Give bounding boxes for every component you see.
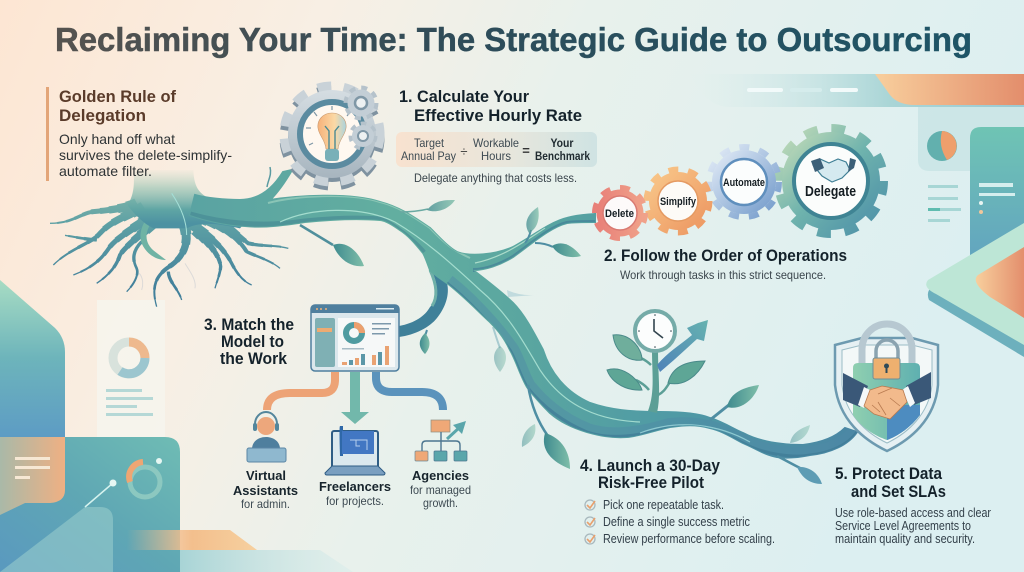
tree roots [50,170,288,307]
gear: automate [709,147,779,217]
callout: golden rule of delegation [46,87,232,181]
gear: automate: Automate [723,177,765,189]
section 1: calculate effective hourly rate [396,88,597,185]
icon: clock sapling with arrow [607,311,708,413]
gear: simplify: Simplify [660,196,697,208]
callout: golden rule of delegation: Delegation [59,107,146,125]
icon: gear with light bulb [286,88,378,184]
label: agencies: Agencies [412,468,469,483]
gear: delegate [778,128,884,234]
section 2: follow the order of operations [604,247,847,282]
title: Reclaiming Your Time: The Strategic Guide to Outsourcing [55,21,972,58]
section 3 heading: the Work [220,350,288,368]
section 5: protect data and SLAs: 5. Protect Data [835,465,943,483]
label: virtual assistants [233,468,298,511]
checklist: Pick one repeatable task. [603,498,724,512]
icon: dashboard monitor [311,305,399,371]
section 5: protect data and SLAs: maintain quality and security. [835,532,975,546]
section 3 heading [204,316,294,368]
formula pill: Your [550,136,574,150]
gear: delete: Delete [605,208,634,220]
gear: delete [594,188,646,238]
label: freelancers: for projects. [326,494,384,508]
callout: golden rule of delegation: Golden Rule of [59,88,176,106]
checklist: Define a single success metric [603,515,750,529]
label: freelancers: Freelancers [319,479,391,494]
section 1: calculate effective hourly rate: Delegate anything that costs less. [414,171,577,185]
section 1: calculate effective hourly rate: 1. Calculate Your [399,88,530,106]
gear: delegate: Delegate [805,184,856,200]
decorative background shapes: top right [690,74,1024,357]
section 2: follow the order of operations: Work through tasks in this strict sequence. [620,268,826,282]
callout: golden rule of delegation: Only hand off what [59,131,175,147]
section 3 heading: Model to [221,333,284,351]
section 3 heading: 3. Match the [204,316,294,334]
section 5: protect data and SLAs: Service Level Agreements to [835,519,971,533]
callout: golden rule of delegation: survives the delete-simplify- [59,147,232,163]
icon: freelancer laptop [325,426,385,475]
decorative background shapes: bottom left [0,280,353,572]
checklist [585,498,775,546]
label: virtual assistants: Virtual [246,468,286,483]
label: agencies: growth. [423,496,458,510]
tree trunk and branches [190,167,857,468]
formula pill: Hours [481,149,511,163]
section 5: protect data and SLAs: Use role-based access and clear [835,506,991,520]
formula pill: ÷ [460,144,468,159]
formula pill [396,132,597,167]
label: virtual assistants: for admin. [241,497,290,511]
section 1: calculate effective hourly rate: Effective Hourly Rate [414,107,582,125]
label: freelancers [319,479,391,508]
label: virtual assistants: Assistants [233,483,298,498]
formula pill: Workable [473,136,519,150]
section 4: launch pilot [580,457,775,546]
icon: four gears order of operations [594,128,884,238]
icon: virtual assistant headset [247,412,286,462]
callout: golden rule of delegation: automate filter. [59,163,152,179]
section 4: launch pilot: Risk-Free Pilot [598,474,704,492]
label: agencies: for managed [410,483,471,497]
formula pill: Benchmark [535,149,590,163]
icon: agency org chart [415,420,467,461]
formula pill: Annual Pay [401,149,456,163]
connector arrows from monitor to models [267,372,443,424]
formula pill: = [522,143,530,158]
labels: engagement models [233,468,471,511]
gear: simplify [646,170,710,232]
section 5: protect data and SLAs: and Set SLAs [851,483,946,501]
section 5: protect data and SLAs [835,465,991,546]
leaves on branches [333,200,822,484]
checklist: Review performance before scaling. [603,532,775,546]
section 4: launch pilot: 4. Launch a 30-Day [580,457,721,475]
label: agencies [410,468,471,510]
icon: security shield with lock and handshake [835,324,938,451]
formula pill: Target [414,136,445,150]
section 2: follow the order of operations: 2. Follow the Order of Operations [604,247,847,265]
